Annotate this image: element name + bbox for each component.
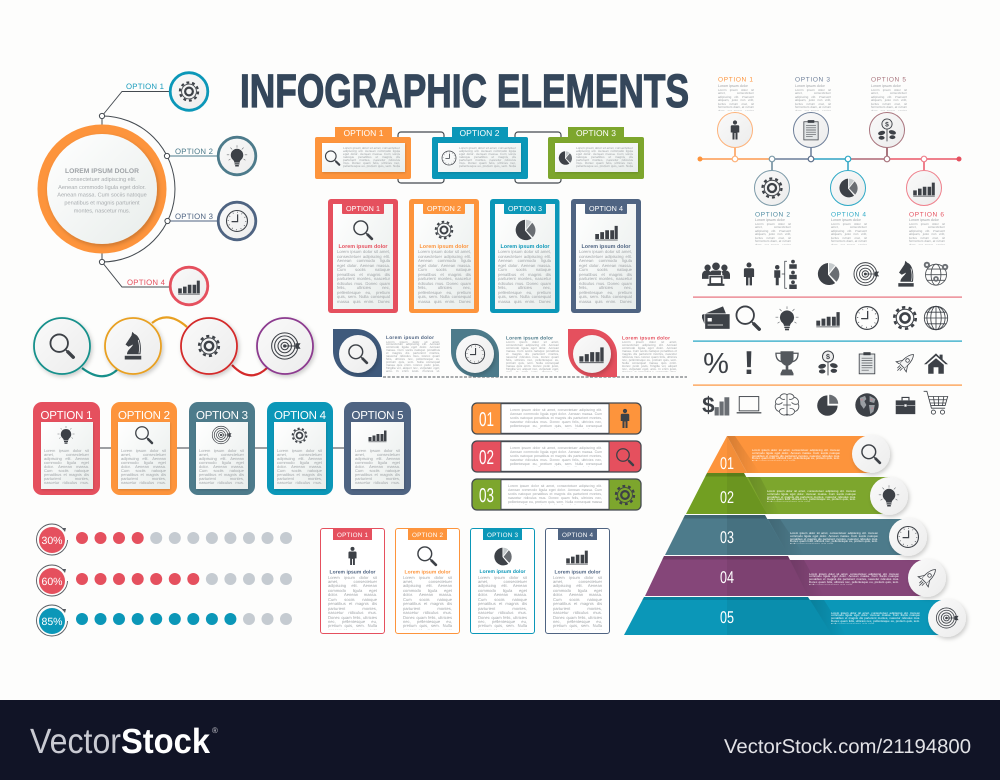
row 60% xyxy=(37,565,292,596)
panel: linked circles row xyxy=(34,317,313,376)
step 3: Lorem ipsum dolor xyxy=(795,84,826,88)
card 2: Lorem ipsum dolor xyxy=(420,244,469,250)
box 2: OPTION 2 xyxy=(460,128,500,138)
step 6: Lorem ipsum dolor xyxy=(909,218,940,222)
step 5: Lorem ipsum dolor xyxy=(871,84,902,88)
bar 01: 01 xyxy=(479,409,494,431)
icon: pie chart quarter xyxy=(817,395,838,416)
card 4: Lorem ipsum dolor xyxy=(582,244,631,250)
panel: four outlined cards xyxy=(320,528,610,634)
icon: wire globe xyxy=(924,306,948,330)
connector lines xyxy=(99,92,218,287)
icon: gear xyxy=(894,307,916,329)
outlined card 1: OPTION 1 xyxy=(337,532,368,539)
pyramid level 02: 02 xyxy=(720,488,734,507)
icon: money plant xyxy=(818,351,838,375)
footer band xyxy=(0,700,1000,780)
step 2 xyxy=(754,170,791,244)
card 4: OPTION 4 xyxy=(589,204,623,213)
bar 03 xyxy=(472,479,641,510)
card 1: Lorem ipsum dolor xyxy=(338,244,388,250)
icon: person xyxy=(744,262,754,285)
central circle: montes, nascetur mus. xyxy=(74,208,131,214)
icon: exclamation: ! xyxy=(744,344,754,381)
outlined card 1 xyxy=(320,528,384,634)
option 1 xyxy=(126,73,208,110)
icon: house xyxy=(924,353,948,374)
circle: target xyxy=(257,318,313,374)
card 3: OPTION 3 xyxy=(508,204,542,213)
leaf 1: Lorem ipsum dolor xyxy=(386,335,434,341)
step 4: Lorem ipsum dolor xyxy=(831,218,862,222)
leaf 3: Lorem ipsum dolor xyxy=(622,336,670,342)
panel: numbered bars xyxy=(472,403,641,510)
step 1 xyxy=(718,76,754,148)
outlined card 4: Lorem ipsum dolor xyxy=(554,570,601,576)
option box 1: OPTION 1 xyxy=(40,410,92,422)
footer band: ® xyxy=(212,726,218,735)
outlined card 4 xyxy=(546,528,610,634)
footer image id: VectorStock.com/21194800 xyxy=(724,736,971,758)
card 2 xyxy=(409,199,479,313)
step 6 xyxy=(906,170,945,244)
row 30%: 30% xyxy=(42,535,62,547)
option box 4: OPTION 4 xyxy=(274,410,327,422)
icon: people at laptop xyxy=(702,262,730,286)
outlined card 2: OPTION 2 xyxy=(412,532,443,539)
card 2: OPTION 2 xyxy=(427,204,461,213)
icon: clipboard xyxy=(859,352,875,374)
pyramid level 03: 03 xyxy=(720,528,734,547)
icon: magnifier xyxy=(736,306,759,329)
central circle: penatibus et magnis parturient xyxy=(64,200,140,206)
step 5 xyxy=(870,76,907,148)
pyramid level 04: 04 xyxy=(720,568,734,587)
circle: gear xyxy=(181,318,237,374)
card 4 xyxy=(571,199,641,313)
outlined card 4: OPTION 4 xyxy=(562,532,593,539)
panel: radial options diagram xyxy=(38,73,256,305)
leaf 1 xyxy=(333,329,440,377)
icon: rocket xyxy=(892,349,919,376)
option box 4 xyxy=(267,402,333,495)
step 5: OPTION 5 xyxy=(871,76,906,84)
option box 3: OPTION 3 xyxy=(196,410,248,422)
leaf 2: Lorem ipsum dolor xyxy=(506,336,553,342)
bar 01 xyxy=(472,403,641,434)
panel: pyramid xyxy=(624,435,966,637)
option 2: OPTION 2 xyxy=(175,147,213,156)
icon: percent: % xyxy=(703,348,729,380)
step 2: OPTION 2 xyxy=(755,212,790,218)
row 85%: 85% xyxy=(42,616,62,628)
box 1 xyxy=(315,127,411,179)
leaf 3 xyxy=(568,329,677,377)
outlined card 2: Lorem ipsum dolor xyxy=(404,570,451,576)
box 1: OPTION 1 xyxy=(344,128,384,138)
option box 5: OPTION 5 xyxy=(352,410,404,422)
bar 02: 02 xyxy=(479,447,494,469)
icon: brain xyxy=(775,394,799,416)
step 3 xyxy=(794,76,831,148)
panel: percent dot rows xyxy=(37,524,292,636)
option box 2: OPTION 2 xyxy=(118,410,170,422)
card 3: Lorem ipsum dolor xyxy=(500,244,550,250)
option box 2 xyxy=(111,402,177,495)
option 4: OPTION 4 xyxy=(127,278,166,287)
icon: bank cards xyxy=(701,306,730,329)
central circle: Aenean commodo ligula eget dolor. xyxy=(58,184,146,191)
icon: globe with pins xyxy=(924,262,948,285)
timeline line xyxy=(700,148,959,170)
outlined card 3: OPTION 3 xyxy=(487,532,518,539)
step 2: Lorem ipsum dolor xyxy=(755,218,786,222)
option box 5 xyxy=(344,402,411,495)
pyramid level 01 xyxy=(707,435,890,473)
icon: bars xyxy=(816,312,840,327)
leaf 2 xyxy=(451,329,559,377)
icon: pie chart xyxy=(818,263,839,285)
icon: briefcase xyxy=(896,397,915,414)
row 85% xyxy=(37,605,292,636)
icon: organisation chart xyxy=(774,260,797,289)
option 2 xyxy=(175,137,256,175)
option 3 xyxy=(175,202,256,240)
option 4 xyxy=(127,267,208,305)
row 60%: 60% xyxy=(42,576,62,588)
step 4 xyxy=(830,170,867,244)
central circle: LOREM IPSUM DOLOR xyxy=(65,168,139,175)
option box 3 xyxy=(189,402,255,495)
panel: six-step timeline xyxy=(698,76,962,244)
panel: four tall cards xyxy=(328,199,641,313)
bar 02 xyxy=(472,441,641,472)
outlined card 3 xyxy=(470,528,534,634)
icon: laptop xyxy=(737,397,761,413)
pyramid level 01: 01 xyxy=(720,454,734,473)
icon: trophy xyxy=(776,351,798,375)
outlined card 2 xyxy=(396,528,460,634)
pyramid level 02 xyxy=(686,473,908,515)
icon: earth xyxy=(855,393,879,417)
icon: clock xyxy=(856,307,878,329)
step 4: OPTION 4 xyxy=(831,212,866,218)
icon: chess knight xyxy=(898,261,914,287)
option 3: OPTION 3 xyxy=(175,212,213,221)
icon: shopping cart xyxy=(924,391,948,414)
row 30% xyxy=(37,524,292,555)
icon: dollar chart xyxy=(702,392,729,418)
step 1: Lorem ipsum dolor xyxy=(718,84,749,88)
title: INFOGRAPHIC ELEMENTS xyxy=(240,64,689,117)
central circle: Aenean massa. Cum sociis natoque xyxy=(57,192,147,198)
circle: chess knight xyxy=(105,318,161,374)
box 3 xyxy=(548,127,644,179)
panel: leaf-shape items xyxy=(333,329,687,377)
bar 03: 03 xyxy=(479,485,494,507)
pyramid level 05 xyxy=(624,597,966,637)
central circle: consectetuer adipiscing elit. xyxy=(68,176,137,183)
footer logo: Vector xyxy=(30,722,121,761)
option 1: OPTION 1 xyxy=(126,82,164,91)
panel: icon grid xyxy=(693,260,962,418)
step 6: OPTION 6 xyxy=(909,212,944,218)
option box 1 xyxy=(33,402,100,495)
panel: five option boxes xyxy=(33,402,411,495)
outlined card 1: Lorem ipsum dolor xyxy=(330,570,376,576)
outlined card 3: Lorem ipsum dolor xyxy=(480,569,526,575)
icon: target xyxy=(854,263,878,285)
step 3: OPTION 3 xyxy=(795,76,830,84)
footer logo: Stock xyxy=(121,722,210,761)
box 3: OPTION 3 xyxy=(576,128,616,138)
pyramid level 05: 05 xyxy=(720,608,734,627)
card 1 xyxy=(328,199,398,313)
icon: light bulb xyxy=(776,306,798,330)
pyramid level 04 xyxy=(645,556,946,597)
panel: three option boxes xyxy=(315,127,644,183)
box 2 xyxy=(432,127,528,179)
card 1: OPTION 1 xyxy=(346,204,380,213)
pyramid level 03 xyxy=(665,515,927,556)
step 1: OPTION 1 xyxy=(718,76,753,84)
circle: magnifier xyxy=(34,318,90,374)
card 3 xyxy=(490,199,560,313)
central circle xyxy=(38,124,166,254)
